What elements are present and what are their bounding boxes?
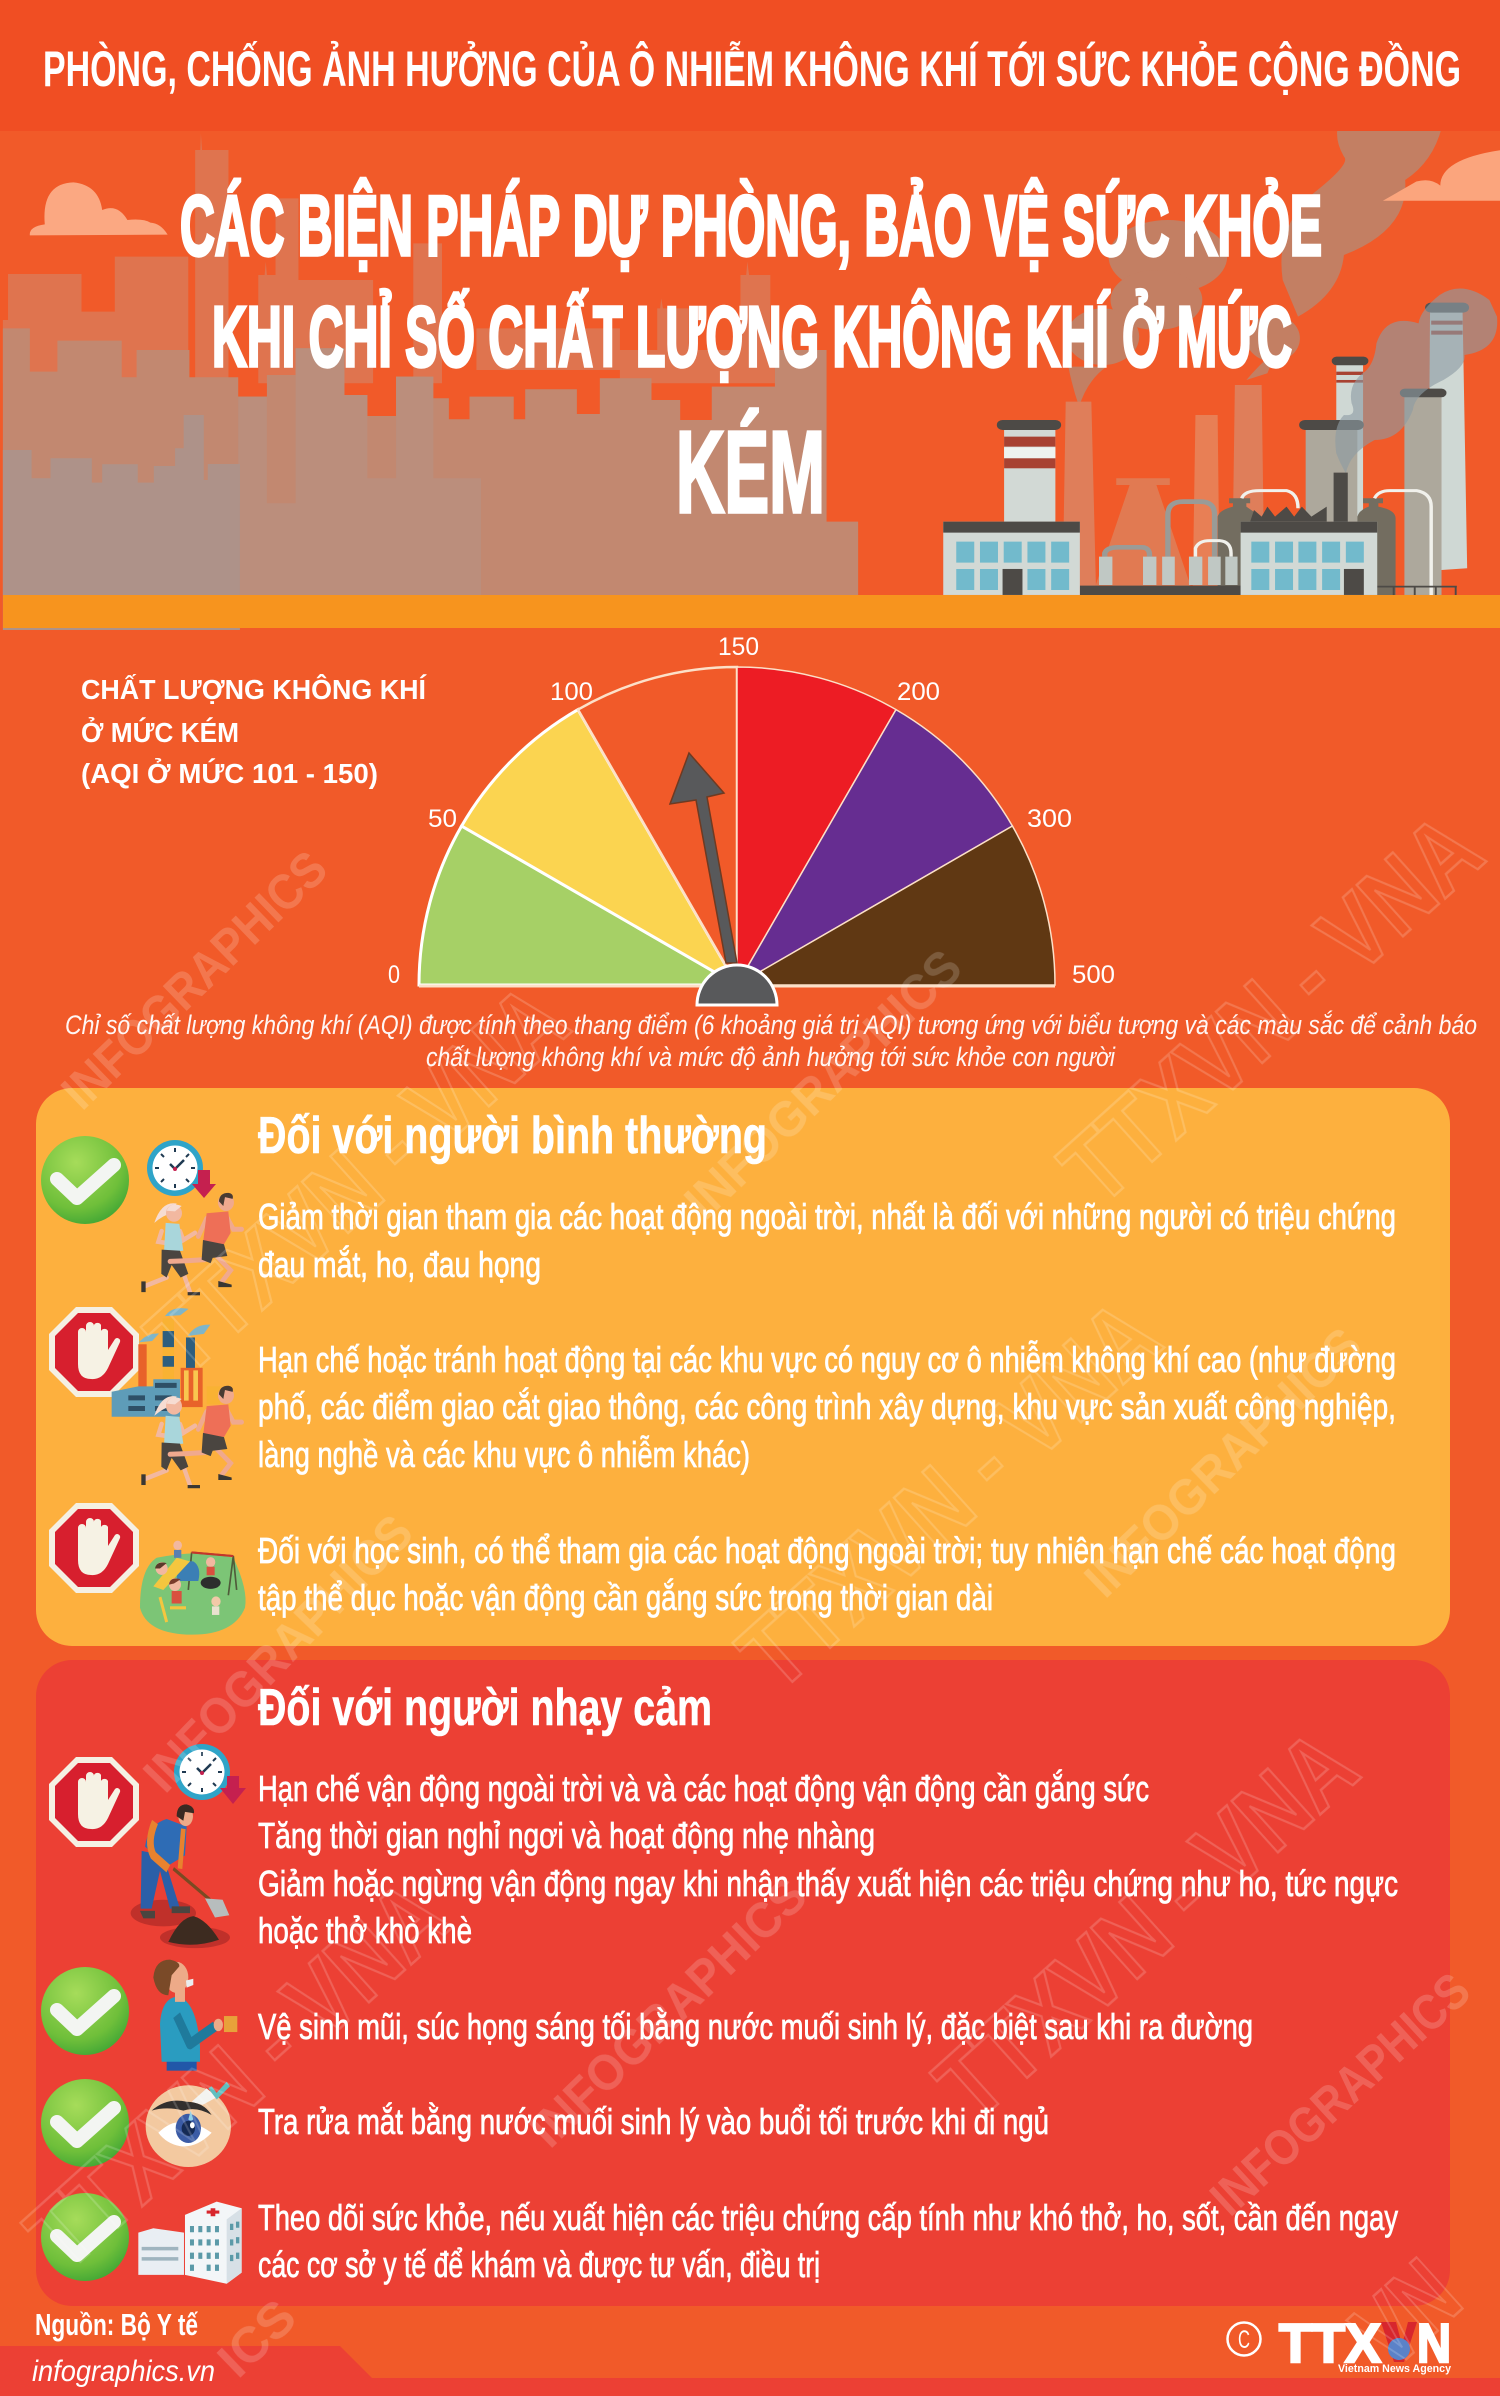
watermarks: INFOGRAPHICS	[51, 840, 338, 1120]
AQI level text block: (AQI Ở MỨC 101 - 150)	[81, 757, 378, 789]
icon: runners	[141, 1193, 242, 1295]
icon: clock with down arrow	[174, 1744, 246, 1804]
icon: green check	[41, 1136, 129, 1224]
illustration: smoke plumes	[1066, 120, 1443, 407]
icon: green check	[41, 2193, 129, 2281]
text: limit exertion: Tăng thời gian nghỉ ngơi và hoạt động nhẹ nhàng	[258, 1815, 875, 1856]
watermarks: TTXVN - VNA	[915, 1709, 1378, 2141]
watermarks: INFOGRAPHICS	[674, 939, 972, 1230]
icon: worker with shovel	[131, 1804, 230, 1948]
icon: playground	[140, 1541, 246, 1635]
TTXVN logo	[1279, 2312, 1452, 2375]
gauge scale labels: 50	[428, 805, 457, 833]
main heading	[180, 178, 1322, 537]
top banner	[0, 0, 1500, 131]
icon: green check	[41, 1967, 129, 2055]
AQI level text block	[81, 673, 427, 789]
AQI level text block: Ở MỨC KÉM	[81, 716, 239, 748]
gauge scale labels: 300	[1027, 805, 1072, 833]
panel: sensitive people	[36, 1660, 1450, 2306]
copyright mark: C	[1238, 2326, 1250, 2354]
gauge scale labels: 0	[388, 961, 400, 989]
text: avoid polluted areas	[258, 1339, 1396, 1475]
text: health monitoring: các cơ sở y tế để khám và được tư vấn, điều trị	[258, 2244, 820, 2285]
watermarks: TTXVN - VNA	[126, 963, 589, 1395]
heading: sensitive people: Đối với người nhạy cảm	[258, 1679, 712, 1737]
text: health monitoring	[258, 2197, 1398, 2285]
illustration: city skyline	[3, 133, 858, 630]
icon: clock with down arrow	[147, 1140, 216, 1198]
source credit: Nguồn: Bộ Y tế	[35, 2307, 199, 2342]
watermarks	[6, 793, 1500, 2388]
text: students: tập thể dục hoặc vận động cần gắng sức trong thời gian dài	[258, 1577, 993, 1618]
icon: runners	[141, 1386, 242, 1488]
icon: hospital buildings	[138, 2202, 242, 2284]
TTXVN logo: Vietnam News Agency	[1338, 2363, 1452, 2375]
text: reduce outdoor time: đau mắt, ho, đau họng	[258, 1244, 541, 1285]
gauge scale labels: 500	[1072, 961, 1115, 989]
watermarks: TTXVN - VNA	[718, 1279, 1181, 1711]
gauge hub	[697, 965, 777, 1005]
AQI caption	[65, 1009, 1477, 1072]
heading: general public: Đối với người bình thường	[258, 1107, 767, 1165]
AQI gauge chart	[388, 633, 1115, 1005]
TTXVN logo: N	[1417, 2312, 1451, 2374]
watermarks: ICS	[207, 2289, 307, 2388]
TTXVN logo: TTX	[1279, 2312, 1381, 2374]
text: limit exertion: hoặc thở khò khè	[258, 1910, 472, 1951]
watermarks: INFOGRAPHICS	[133, 1504, 424, 1803]
bottom band	[0, 2346, 1500, 2396]
gauge needle	[670, 753, 737, 963]
illustration: cloud right	[1383, 150, 1500, 201]
icon: eye with drops	[146, 2082, 231, 2167]
text: avoid polluted areas: làng nghề và các khu vực ô nhiễm khác)	[258, 1434, 750, 1475]
icon: green check	[41, 2079, 129, 2167]
panel: general public	[36, 1088, 1450, 1646]
icon: stop hand	[49, 1307, 139, 1397]
gauge scale labels	[388, 633, 1115, 989]
gauge scale labels: 150	[718, 633, 759, 661]
gauge scale labels: 100	[550, 678, 593, 706]
icon: factory	[112, 1309, 220, 1417]
text: limit exertion	[258, 1768, 1398, 1951]
icon: stop hand	[49, 1757, 139, 1847]
watermarks: TTXVN - VNA	[6, 1859, 469, 2291]
AQI caption: chất lượng không khí và mức độ ảnh hưởng tới sức khỏe con người	[426, 1042, 1116, 1072]
icon: man with cup	[153, 1960, 237, 2071]
icon: stop hand	[49, 1503, 139, 1593]
illustration: cloud left	[30, 182, 168, 235]
illustration: factory	[943, 289, 1497, 596]
copyright mark	[1228, 2322, 1260, 2356]
text: eye rinse: Tra rửa mắt bằng nước muối sinh lý vào buổi tối trước khi đi ngủ	[258, 2101, 1049, 2142]
ground band	[3, 595, 1500, 628]
text: limit exertion: Hạn chế vận động ngoài trời và và các hoạt động vận động cần gắng sức	[258, 1768, 1149, 1809]
main heading: KÉM	[676, 407, 825, 537]
watermarks: INFOGRAPHICS	[1074, 1317, 1372, 1608]
text: reduce outdoor time	[258, 1196, 1396, 1285]
watermarks: INFOGRAPHICS	[519, 1867, 817, 2158]
AQI level text block: CHẤT LƯỢNG KHÔNG KHÍ	[81, 673, 427, 705]
gauge scale labels: 200	[897, 678, 940, 706]
website: infographics.vn	[32, 2355, 215, 2388]
text: students	[258, 1530, 1396, 1618]
